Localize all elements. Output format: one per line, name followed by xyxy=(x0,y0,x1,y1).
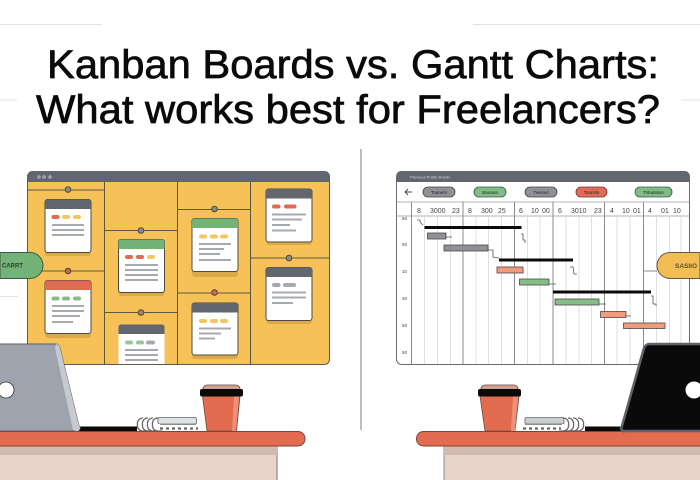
gantt date header: 01 xyxy=(661,208,669,215)
kanban card 3 xyxy=(118,240,164,296)
gantt row labels: 50 xyxy=(402,323,408,328)
panel: gantt chart xyxy=(396,171,690,364)
gantt date header xyxy=(417,208,681,215)
title: What works best for Freelancers? xyxy=(36,88,660,132)
gantt legend chips: Tribulation xyxy=(643,190,664,195)
gantt date header: 8 xyxy=(468,208,472,215)
right notebook xyxy=(523,418,585,431)
gantt row labels: 50 xyxy=(402,216,408,221)
gantt date header: 3000 xyxy=(430,208,446,215)
gantt date header: 01 xyxy=(633,208,641,215)
callout: right yellow pill xyxy=(644,252,700,278)
kanban card 6 xyxy=(192,303,238,359)
gantt date header: 8 xyxy=(417,208,421,215)
gantt connectors xyxy=(417,220,656,316)
gantt date header: 23 xyxy=(452,208,460,215)
gantt legend chips: Twisted xyxy=(533,190,549,195)
kanban card 2 xyxy=(45,280,91,338)
kanban card 1 xyxy=(45,200,91,256)
gantt row labels xyxy=(402,216,408,355)
gantt legend chips xyxy=(423,187,672,197)
left notebook xyxy=(137,418,198,431)
callout: right yellow pill: SASIIO xyxy=(675,263,697,270)
icon: pins xyxy=(65,187,292,315)
gantt date header: 4 xyxy=(610,208,614,215)
gantt date header: 6 xyxy=(519,208,523,215)
gantt task bars xyxy=(428,233,665,328)
right laptop xyxy=(582,344,700,431)
kanban card 7 xyxy=(266,189,312,245)
gantt date header: 10 xyxy=(531,208,539,215)
panel: gantt chart: Previous Public Roster xyxy=(410,174,451,180)
kanban card 4 xyxy=(118,324,164,364)
left coffee cup xyxy=(200,385,243,431)
gantt date header: 3010 xyxy=(571,208,587,215)
right coffee cup xyxy=(478,385,521,431)
panel: kanban board xyxy=(28,171,330,364)
gantt date header: 6 xyxy=(558,208,562,215)
callout: left green pill: CARRT xyxy=(2,264,23,270)
gantt date header: 300 xyxy=(481,208,493,215)
title xyxy=(36,43,660,132)
gantt date header: 23 xyxy=(594,208,602,215)
gantt date header: 25 xyxy=(498,208,506,215)
right desk xyxy=(416,432,700,480)
kanban card 5 xyxy=(192,218,238,277)
gantt row labels: 30 xyxy=(402,296,408,301)
gantt date header: 00 xyxy=(542,208,550,215)
gantt row labels: 10 xyxy=(402,269,408,274)
callout: left green pill xyxy=(0,252,43,278)
gantt row labels: 50 xyxy=(402,242,408,247)
gantt row labels: 50 xyxy=(402,350,408,355)
gantt legend chips: Trainers xyxy=(431,190,448,195)
gantt date header: 4 xyxy=(648,208,652,215)
gantt legend chips: Tourists xyxy=(584,190,600,195)
title: Kanban Boards vs. Gantt Charts: xyxy=(47,43,659,87)
gantt date header: 10 xyxy=(622,208,630,215)
kanban card 8 xyxy=(266,268,312,324)
icon: back arrow xyxy=(405,189,412,195)
left desk xyxy=(0,432,305,480)
gantt date header: 10 xyxy=(673,208,681,215)
left laptop xyxy=(0,344,140,431)
gantt summary bars xyxy=(424,226,651,294)
gantt legend chips: Banana xyxy=(482,190,498,195)
